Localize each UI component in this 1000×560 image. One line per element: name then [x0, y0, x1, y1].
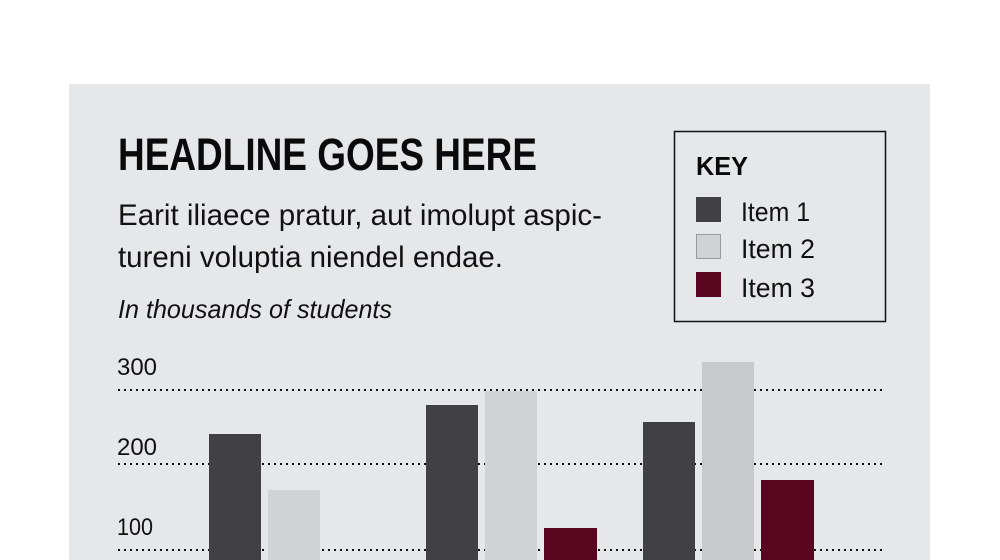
legend: key	[674, 132, 886, 322]
legend: key: Item 2	[741, 234, 815, 264]
title: HEADLINE GOES HERE	[118, 129, 537, 180]
subtitle: units: In thousands of students	[118, 294, 392, 324]
legend: key: Item 1	[741, 197, 810, 227]
chart: axis labels: 300	[117, 354, 157, 381]
chart: axis labels: 200	[117, 434, 157, 461]
text block: description: tureni voluptia niendel endae.	[118, 241, 503, 274]
legend: key: Item 3	[741, 273, 815, 303]
legend: key: KEY	[696, 151, 748, 181]
chart: bars	[209, 362, 814, 560]
panel: background	[69, 84, 930, 560]
text block: description: Earit iliaece pratur, aut imolupt aspic-	[118, 199, 602, 232]
text block: description	[118, 199, 602, 274]
chart: axis labels	[117, 354, 157, 541]
chart: axis labels: 100	[117, 514, 153, 541]
